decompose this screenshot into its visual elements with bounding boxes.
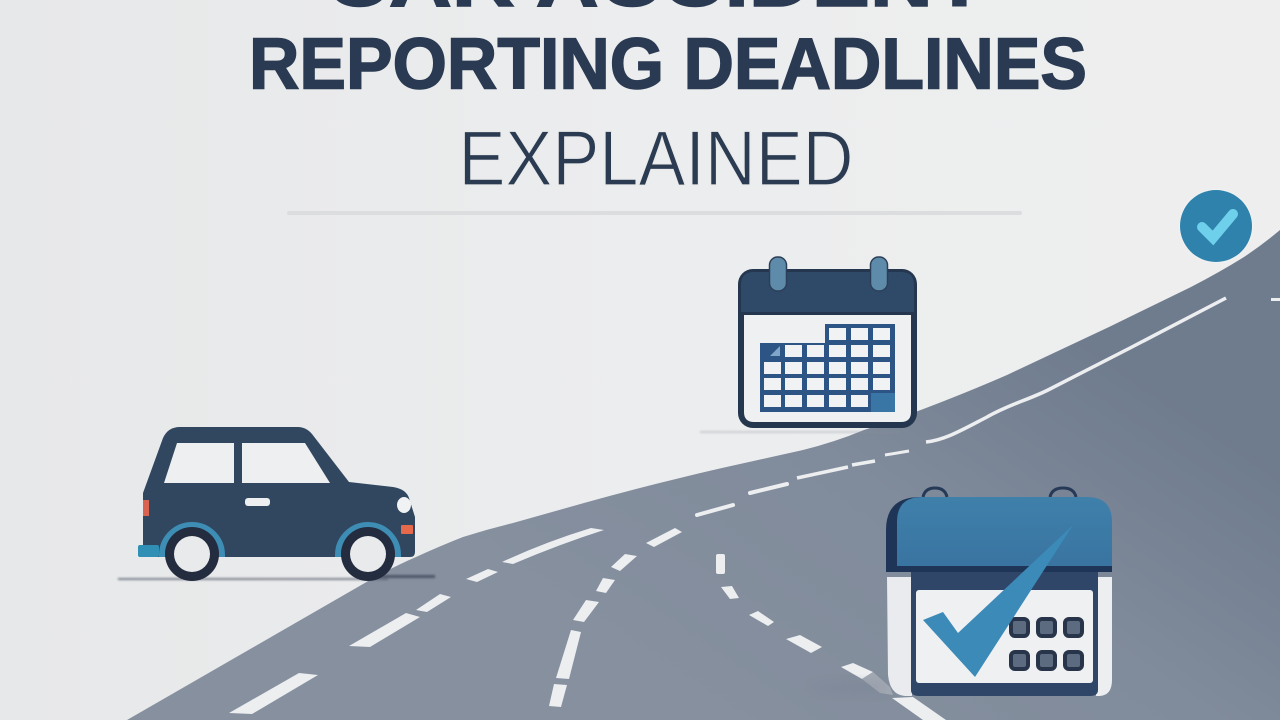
car — [118, 427, 435, 581]
middle branch dashes — [549, 554, 637, 707]
right branch dashes — [716, 554, 946, 720]
calendar page — [744, 315, 911, 422]
binding loops — [923, 488, 1076, 497]
white page — [916, 590, 1093, 683]
left white strip — [887, 577, 912, 696]
rear wheel — [162, 525, 222, 581]
road — [127, 230, 1280, 720]
front marker light — [401, 525, 413, 534]
tail light — [143, 500, 149, 516]
binding rings — [770, 257, 888, 291]
heading line: reporting deadlines: REPORTING DEADLINES — [249, 24, 1087, 104]
front wheel — [338, 525, 398, 581]
calendar shadow — [700, 431, 900, 433]
navy panel — [911, 572, 1098, 696]
icon: wall calendar — [700, 257, 917, 433]
calendar header — [741, 272, 914, 312]
subheading: explained: EXPLAINED — [458, 114, 854, 202]
front window — [242, 443, 330, 483]
title — [249, 0, 1087, 202]
door handle — [245, 498, 270, 506]
icon: check badge — [1179, 189, 1253, 263]
calendar header — [897, 497, 1112, 567]
headlight — [397, 497, 411, 513]
check mark — [923, 525, 1073, 677]
calendar frame — [738, 269, 917, 428]
date buttons — [1011, 619, 1082, 669]
icon: calendar with check mark — [810, 488, 1112, 696]
lane markings — [229, 298, 1280, 720]
calendar back — [886, 497, 960, 572]
car body — [143, 427, 415, 557]
date grid — [760, 324, 895, 412]
rear window — [164, 443, 234, 483]
ground shadow — [118, 575, 435, 580]
right white strip — [1096, 577, 1112, 696]
road shadow — [810, 682, 890, 694]
main dashed line — [229, 298, 1280, 714]
header band — [886, 566, 1112, 572]
rear bumper — [138, 545, 159, 557]
